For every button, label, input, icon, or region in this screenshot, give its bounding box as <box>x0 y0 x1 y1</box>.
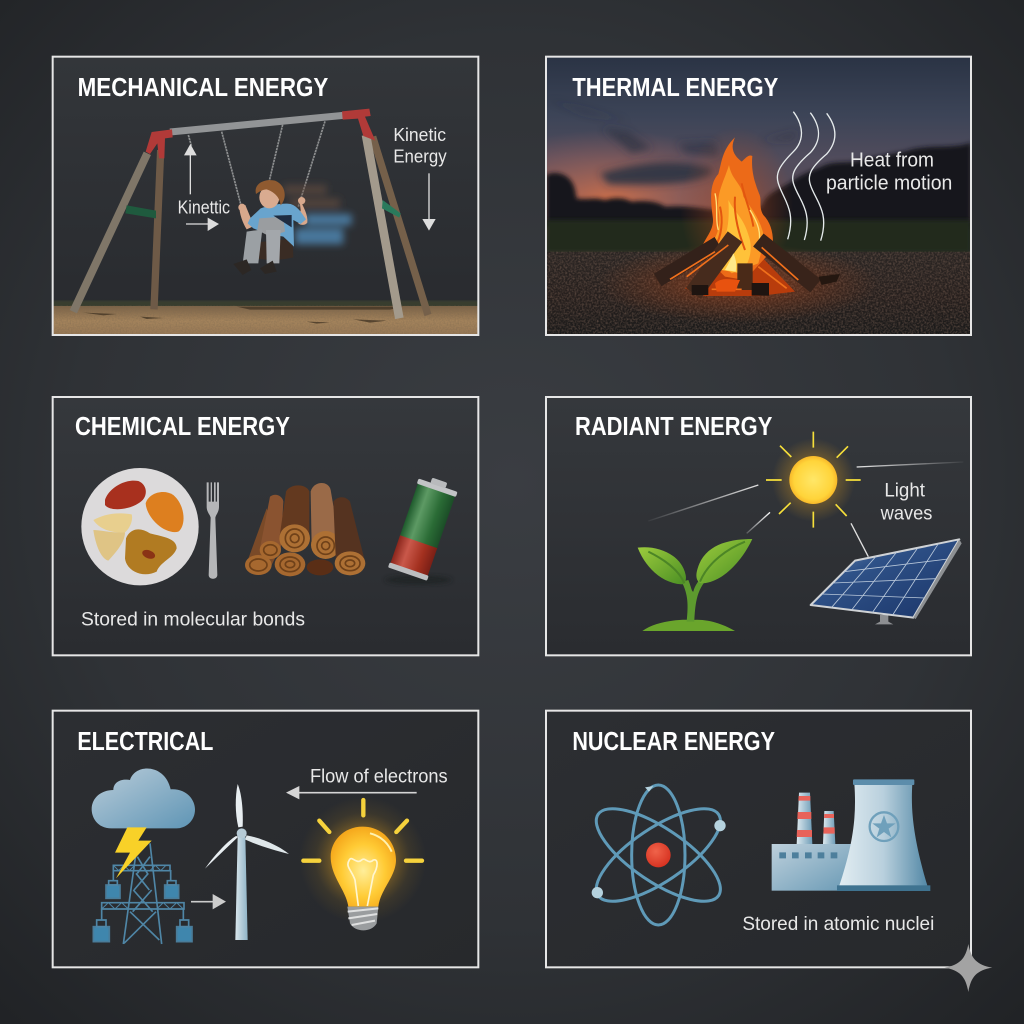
panel: nuclear energy <box>546 711 992 992</box>
label: particle motion: particle motion <box>826 172 952 194</box>
flames <box>700 137 773 280</box>
light bulb <box>299 797 426 930</box>
panel: chemical energy <box>53 397 478 655</box>
swing set frame <box>73 109 428 318</box>
atom <box>583 785 733 925</box>
panel: thermal energy <box>452 57 971 335</box>
swing chains <box>188 121 325 207</box>
smokestack large <box>797 793 812 844</box>
cooling tower <box>837 779 930 891</box>
plant <box>638 539 752 631</box>
arrow to turbine <box>191 894 226 909</box>
wind turbine <box>205 784 289 940</box>
fork <box>207 482 219 579</box>
lightning bolt <box>115 827 152 878</box>
label: light: Light <box>884 481 926 502</box>
arrow right <box>186 218 219 231</box>
battery <box>385 473 459 585</box>
label: kinetic left: Kinettic <box>178 196 230 217</box>
title: NUCLEAR ENERGY <box>572 726 775 756</box>
tree line <box>546 143 971 227</box>
panel: electrical <box>53 711 478 967</box>
nuclear plant <box>772 779 930 891</box>
panel: radiant energy <box>546 397 971 655</box>
arrow: flow <box>286 786 417 799</box>
caption: Stored in atomic nuclei <box>742 914 934 935</box>
cloud <box>92 768 195 828</box>
arrow up <box>184 144 197 194</box>
panel: mechanical energy <box>53 57 478 336</box>
heat waves <box>777 112 835 241</box>
title: ELECTRICAL <box>77 726 213 756</box>
motion blur <box>283 185 352 244</box>
ground <box>546 243 971 335</box>
sun <box>766 432 861 528</box>
label: waves: waves <box>880 503 932 524</box>
border <box>546 57 971 335</box>
title: THERMAL ENERGY <box>572 72 779 102</box>
solar panel <box>811 539 962 624</box>
plate of food <box>81 468 199 585</box>
power tower <box>93 843 192 944</box>
factory building <box>772 844 852 891</box>
grass <box>546 220 971 253</box>
title: MECHANICAL ENERGY <box>78 72 329 102</box>
sparkle mark <box>944 944 992 992</box>
label: heat: Heat from <box>850 150 934 172</box>
ground <box>53 306 478 336</box>
logs <box>658 237 840 293</box>
border <box>53 57 478 335</box>
embers <box>685 259 795 296</box>
child on swing <box>233 180 307 275</box>
fire glow <box>686 137 788 260</box>
label: energy: Energy <box>393 146 447 167</box>
label: flow of electrons: Flow of electrons <box>310 767 448 788</box>
sunset sky <box>547 58 970 247</box>
arrow down <box>422 173 436 231</box>
log pile <box>245 483 365 576</box>
caption: Stored in molecular bonds <box>81 610 305 631</box>
title: CHEMICAL ENERGY <box>75 411 290 441</box>
light rays <box>648 462 963 557</box>
smokestack small <box>823 811 835 844</box>
title: RADIANT ENERGY <box>575 411 773 441</box>
label: kinetic energy right: Kinetic <box>393 124 446 145</box>
